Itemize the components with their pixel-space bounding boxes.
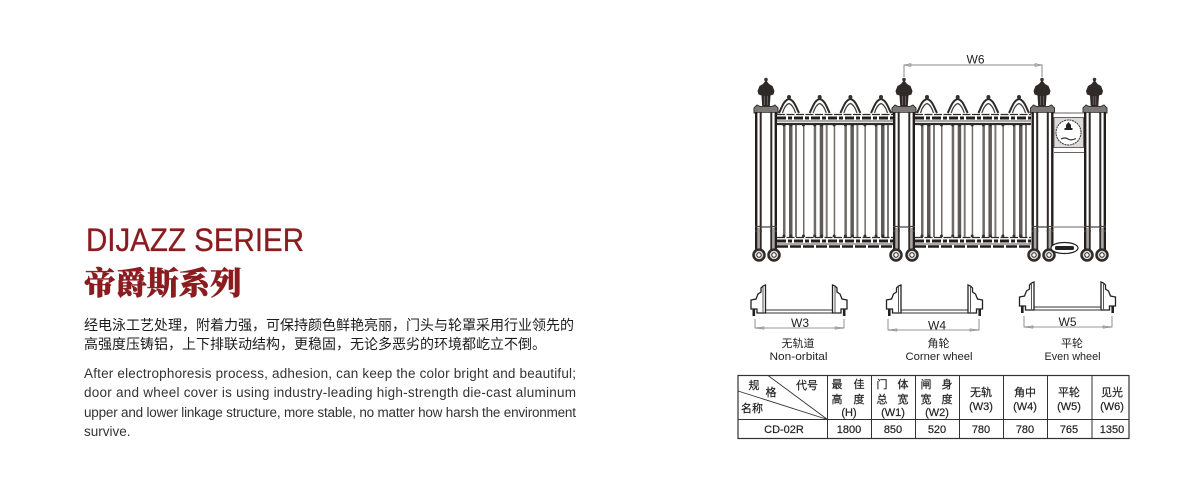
track plan: W3 non-orbital: 无轨道	[782, 336, 814, 350]
track plan: W4 corner wheel	[886, 285, 982, 363]
heading: Chinese series name: 帝爵斯系列	[84, 265, 242, 301]
table header: W1: 门	[876, 377, 888, 391]
dimension: W6: W6	[966, 52, 985, 66]
table header: corner cell: 规	[748, 378, 760, 392]
specification table	[738, 376, 1129, 438]
table header: W2: 身	[942, 377, 952, 391]
table header: corner cell	[741, 378, 818, 415]
table header: height: (H)	[841, 407, 857, 419]
table data row	[764, 424, 1124, 436]
text block: English description	[84, 366, 576, 439]
table header: W5: 平轮	[1058, 385, 1080, 399]
table header: W2	[920, 377, 952, 419]
text block: English description: door and wheel cover is using industry-leading high-strength die-cast aluminum	[84, 385, 576, 400]
dimension: W6	[904, 52, 1042, 77]
track plan: W5 even wheel: 平轮	[1061, 336, 1083, 350]
table header: W1: (W1)	[881, 407, 905, 419]
table data row: 780	[972, 424, 990, 436]
table header: W1: 体	[898, 377, 908, 391]
track plan: W4 corner wheel: 角轮	[928, 336, 950, 350]
track plan: W4 corner wheel: W4	[928, 318, 946, 332]
table header: corner cell: 格	[766, 385, 776, 399]
table data row: 1800	[837, 424, 861, 436]
table header: W3	[969, 385, 993, 413]
text block: Chinese description: 高强度压铸铝，上下排联动结构，更稳固，无论多恶劣的环境都屹立不倒。	[84, 336, 546, 352]
table header: height: 度	[854, 392, 864, 406]
table data row: 1350	[1100, 424, 1124, 436]
table header: W1	[876, 377, 908, 419]
control box with logo	[1054, 113, 1084, 227]
table header: corner cell: 代号	[796, 379, 818, 392]
text block: English description: survive.	[84, 424, 131, 439]
track plan: W3 non-orbital: W3	[791, 316, 809, 330]
table data row: 780	[1016, 424, 1034, 436]
table header: W6: (W6)	[1100, 401, 1124, 413]
table header: W1: 宽	[898, 392, 908, 406]
track plan: W5 even wheel: Even wheel	[1044, 351, 1100, 363]
text block: English description: After electrophoresis process, adhesion, can keep the color bright and beautiful;	[84, 366, 576, 381]
gate post 4	[1082, 78, 1108, 260]
table data row: 520	[928, 424, 946, 436]
table header: W2: 宽	[920, 392, 932, 406]
table header: W5	[1057, 385, 1081, 413]
table header: W4	[1013, 386, 1037, 413]
text block: Chinese description: 经电泳工艺处理，附着力强，可保持颜色鲜艳亮丽，门头与轮罩采用行业领先的	[84, 317, 574, 333]
track plan: W3 non-orbital: Non-orbital	[770, 351, 828, 363]
table header: height: 高	[832, 392, 842, 406]
track plan: W5 even wheel	[1020, 282, 1116, 363]
table header: height	[832, 377, 864, 419]
track plan: W5 even wheel: W5	[1058, 315, 1077, 329]
gate post 3	[1028, 78, 1054, 260]
gate elevation drawing	[754, 52, 1108, 260]
table header: height: 最	[832, 378, 842, 391]
table header: W3: 无轨	[970, 385, 992, 399]
table data row: 850	[884, 424, 902, 436]
bottom wheel cover	[1051, 242, 1078, 254]
gate post 1	[754, 78, 780, 260]
gate post 2	[890, 78, 918, 260]
track plan: W3 non-orbital	[751, 285, 847, 363]
table header: W4: (W4)	[1013, 401, 1037, 413]
table grid	[738, 376, 1129, 438]
table header: W1: 总	[876, 392, 888, 406]
table header: W4: 角中	[1014, 386, 1036, 399]
gate section: left panel	[777, 95, 897, 246]
table header: height: 佳	[854, 377, 864, 391]
table header: W6	[1100, 385, 1124, 413]
gate section: right panel	[915, 95, 1035, 246]
table header: W6: 见光	[1101, 385, 1123, 399]
table header: W5: (W5)	[1057, 401, 1081, 413]
track plan: W4 corner wheel: Corner wheel	[906, 351, 972, 363]
table header: corner cell: 名称	[741, 401, 763, 415]
title: DIJAZZ SERIER: DIJAZZ SERIER	[86, 222, 304, 258]
text block: Chinese description	[84, 317, 574, 352]
table data row: 765	[1060, 424, 1078, 436]
table header: W2: 闸	[920, 378, 932, 391]
table header: W2: (W2)	[925, 407, 949, 419]
table data row: CD-02R	[764, 424, 804, 436]
table header: W3: (W3)	[969, 401, 993, 413]
table header: W2: 度	[942, 392, 952, 406]
text block: English description: upper and lower linkage structure, more stable, no matter how harsh the environment	[84, 405, 576, 420]
